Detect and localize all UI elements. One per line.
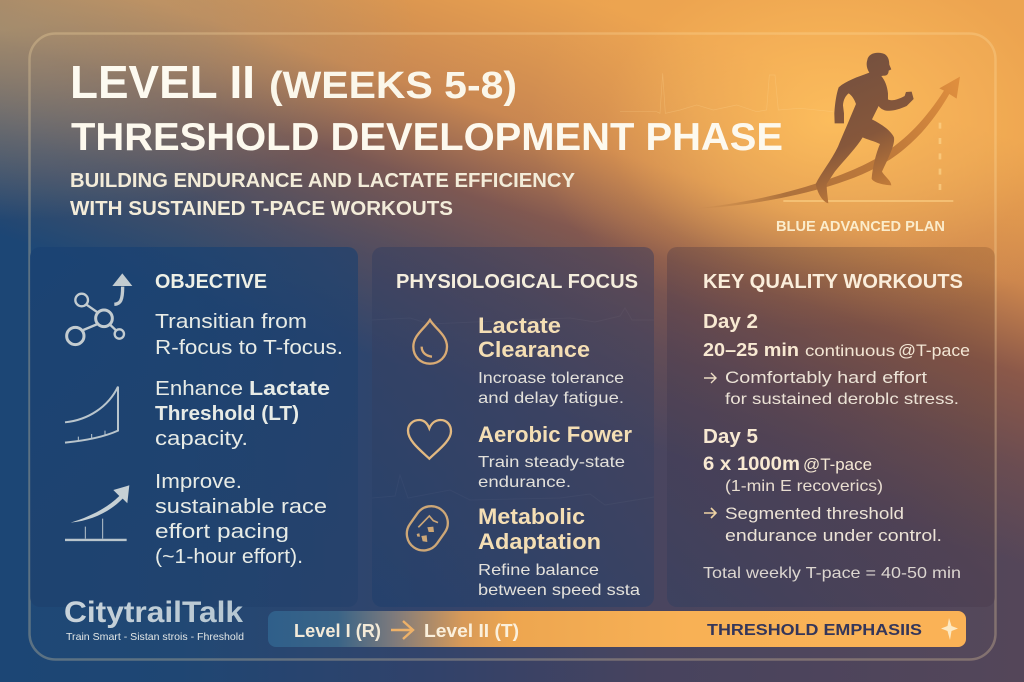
objective text 2: capacity. xyxy=(155,428,248,450)
metabolic adaptation text: between speed ssta xyxy=(478,582,640,599)
metabolic adaptation text: Metabolic xyxy=(478,504,585,529)
objective text 2: Threshold (LT) xyxy=(155,403,299,425)
objective text 2: Lactate xyxy=(249,378,330,400)
objective heading: OBJECTIVE xyxy=(155,271,267,293)
lactate clearance text: Lactate xyxy=(478,313,561,338)
objective text 3: Improve. xyxy=(155,471,242,493)
panel: physiological focus xyxy=(372,247,654,607)
icon: lactate curve xyxy=(65,387,118,443)
arrow xyxy=(391,621,413,639)
icon: network with up arrow xyxy=(67,273,132,345)
objective text 3: effort pacing xyxy=(155,521,289,543)
subtitle: BUILDING ENDURANCE AND LACTATE EFFICIENCY xyxy=(70,170,576,192)
physiological heading: PHYSIOLOGICAL FOCUS xyxy=(396,271,638,293)
weekly total: Total weekly T-pace = 40-50 min xyxy=(703,565,961,582)
panel: objective xyxy=(30,247,358,607)
day 5 workout: endurance under control. xyxy=(725,526,942,545)
lactate clearance text: Incroase tolerance xyxy=(478,370,624,387)
objective text 1: Transitian from xyxy=(155,311,307,333)
level I label: Level I (R) xyxy=(294,621,381,641)
day 2 workout: continuous xyxy=(805,343,895,360)
day 2 workout: Day 2 xyxy=(703,311,758,333)
lactate clearance text: and delay fatigue. xyxy=(478,390,624,407)
objective text 1 xyxy=(155,311,343,359)
day 2 workout: for sustained deroblc stress. xyxy=(725,391,959,408)
runner silhouette xyxy=(816,53,914,203)
rising arrow xyxy=(690,77,960,209)
icon: sparkle xyxy=(941,618,958,640)
objective text 2 xyxy=(155,378,330,450)
day 5 workout: 6 x 1000m xyxy=(703,454,800,475)
workouts heading: KEY QUALITY WORKOUTS xyxy=(703,271,963,293)
icon: mitochondrion xyxy=(400,500,454,557)
metabolic adaptation text: Adaptation xyxy=(478,529,601,554)
icon: heart xyxy=(408,420,451,459)
chart axes xyxy=(783,123,953,201)
day 2 workout: Comfortably hard effort xyxy=(725,368,927,387)
faint ECG lines xyxy=(372,308,654,505)
brand logo xyxy=(64,596,244,643)
subtitle xyxy=(70,170,576,220)
aerobic power text: Train steady-state xyxy=(478,454,625,471)
panel: key quality workouts xyxy=(667,247,995,607)
progress bar xyxy=(268,611,966,647)
day 5 workout: Day 5 xyxy=(703,426,758,448)
objective text 2: Enhance xyxy=(155,378,243,400)
emphasis label: THRESHOLD EMPHASIIS xyxy=(707,622,922,639)
plan label: BLUE ADVANCED PLAN xyxy=(776,218,945,235)
brand logo: CitytrailTalk xyxy=(64,596,243,629)
metabolic adaptation text: Refine balance xyxy=(478,562,599,579)
day 5 workout: Segmented threshold xyxy=(725,504,904,523)
lactate clearance text: Clearance xyxy=(478,337,590,362)
title: THRESHOLD DEVELOPMENT PHASE xyxy=(71,116,783,159)
day 2 workout xyxy=(703,311,970,408)
lactate clearance text xyxy=(478,313,624,407)
background ECG line xyxy=(620,73,833,113)
brand logo: Train Smart - Sistan strois - Fhreshold xyxy=(66,631,244,643)
objective text 3: sustainable race xyxy=(155,496,327,518)
aerobic power text: endurance. xyxy=(478,474,571,491)
runner illustration xyxy=(690,53,960,209)
title: (WEEKS 5-8) xyxy=(269,65,517,107)
day 2 workout: @T-pace xyxy=(898,341,970,360)
day 2 workout: 20–25 min xyxy=(703,340,799,360)
title xyxy=(70,56,783,159)
objective text 3: (~1-hour effort). xyxy=(155,546,303,568)
day 5 workout: @T-pace xyxy=(803,455,872,474)
day 5 workout xyxy=(703,426,942,545)
icon: pacing arrow xyxy=(65,485,129,540)
objective text 3 xyxy=(155,471,327,568)
aerobic power text: Aerobic Fower xyxy=(478,422,632,447)
subtitle: WITH SUSTAINED T-PACE WORKOUTS xyxy=(70,198,453,220)
aerobic power text xyxy=(478,422,632,491)
metabolic adaptation text xyxy=(478,504,640,599)
title: LEVEL II xyxy=(70,56,255,108)
level II label: Level II (T) xyxy=(424,621,519,641)
day 5 workout: (1-min E recoverics) xyxy=(725,478,883,495)
icon: droplet xyxy=(413,320,447,364)
objective text 1: R-focus to T-focus. xyxy=(155,337,343,359)
